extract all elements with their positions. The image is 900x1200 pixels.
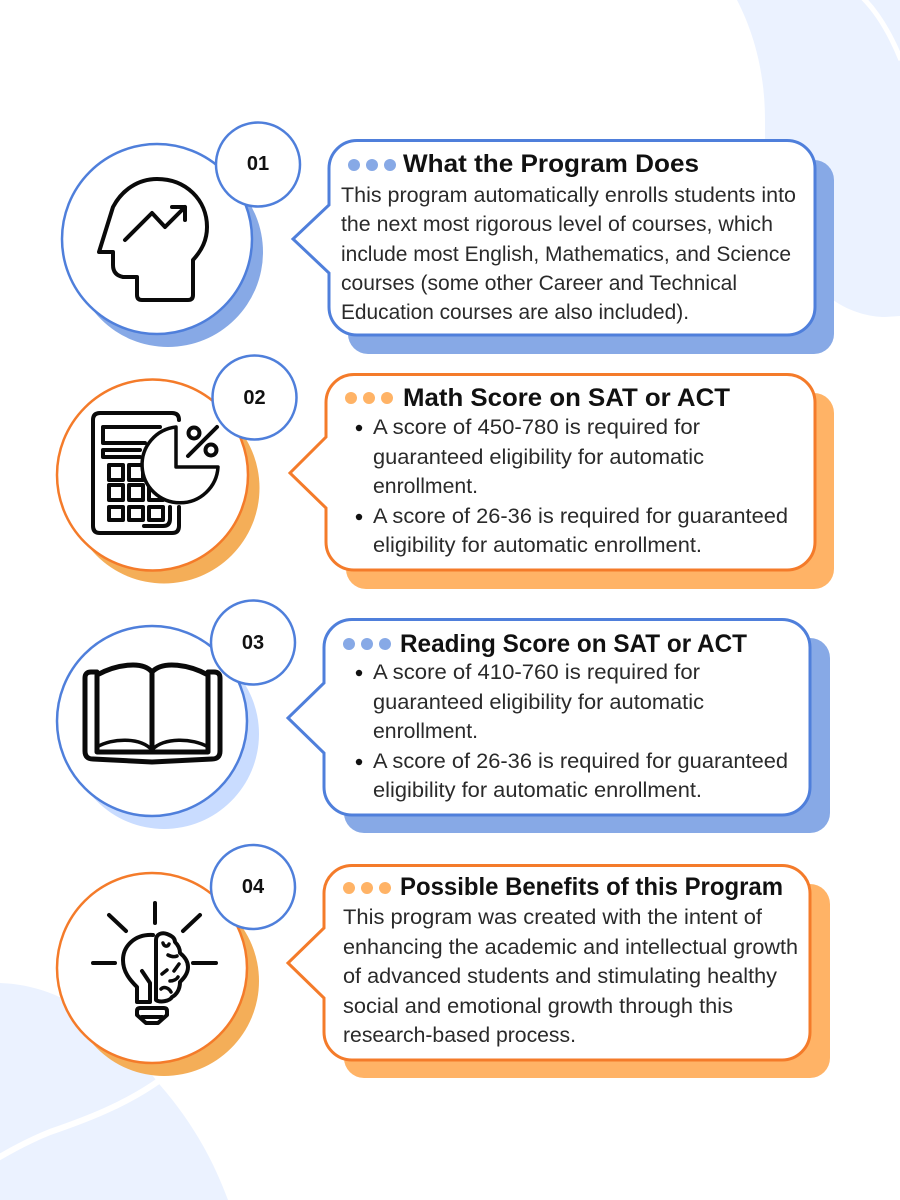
callout card 4: Possible Benefits of this Program (400, 873, 783, 901)
callout card 1: This program automatically enrolls students into (341, 184, 796, 207)
callout card 1: the next most rigorous level of courses, which (341, 213, 773, 236)
callout card 1: Education courses are also included). (341, 301, 689, 324)
number badge 01 (216, 122, 300, 206)
callout card 4: This program was created with the intent of (343, 906, 762, 929)
icon circle 2 with calculator icon (57, 380, 260, 584)
icon circle 4 with lightbulb brain icon (57, 873, 259, 1076)
number badge 03: 03 (242, 632, 264, 654)
number badge 02 (212, 356, 296, 440)
callout card 2: Math Score on SAT or ACT (403, 384, 730, 412)
icon circle 3 with book icon (57, 626, 259, 829)
callout card 1: courses (some other Career and Technical (341, 272, 737, 295)
callout card 3: enrollment. (373, 720, 478, 743)
callout card 4 (288, 866, 830, 1078)
callout card 3: A score of 26-36 is required for guaranteed (373, 750, 788, 773)
number badge 01: 01 (247, 153, 269, 175)
callout card 3: Reading Score on SAT or ACT (400, 630, 747, 658)
callout card 2: guaranteed eligibility for automatic (373, 446, 704, 469)
callout card 2: A score of 26-36 is required for guaranteed (373, 505, 788, 528)
callout card 3: eligibility for automatic enrollment. (373, 779, 702, 802)
callout card 3: guaranteed eligibility for automatic (373, 691, 704, 714)
callout card 1 (293, 140, 834, 354)
callout card 4: enhancing the academic and intellectual growth (343, 936, 798, 959)
callout card 3 (288, 620, 830, 833)
panel: step 4 possible benefits (57, 845, 830, 1078)
number badge 04 (211, 845, 295, 929)
icon circle 1 with head icon (62, 144, 263, 347)
callout card 1: What the Program Does (403, 150, 699, 178)
number badge 03 (211, 600, 295, 684)
callout card 4: of advanced students and stimulating healthy (343, 965, 778, 988)
panel: step 1 what the program does (62, 122, 834, 354)
callout card 4: research-based process. (343, 1024, 576, 1047)
number badge 02: 02 (243, 387, 266, 409)
callout card 1: include most English, Mathematics, and Science (341, 243, 791, 266)
callout card 4: social and emotional growth through this (343, 995, 733, 1018)
callout card 2: A score of 450-780 is required for (373, 416, 700, 439)
callout card 2: eligibility for automatic enrollment. (373, 534, 702, 557)
panel: step 3 reading score (57, 600, 830, 833)
number badge 04: 04 (242, 876, 265, 898)
callout card 3: A score of 410-760 is required for (373, 661, 700, 684)
callout card 2: enrollment. (373, 475, 478, 498)
callout card 2 (290, 374, 834, 589)
panel: step 2 math score (57, 356, 834, 589)
